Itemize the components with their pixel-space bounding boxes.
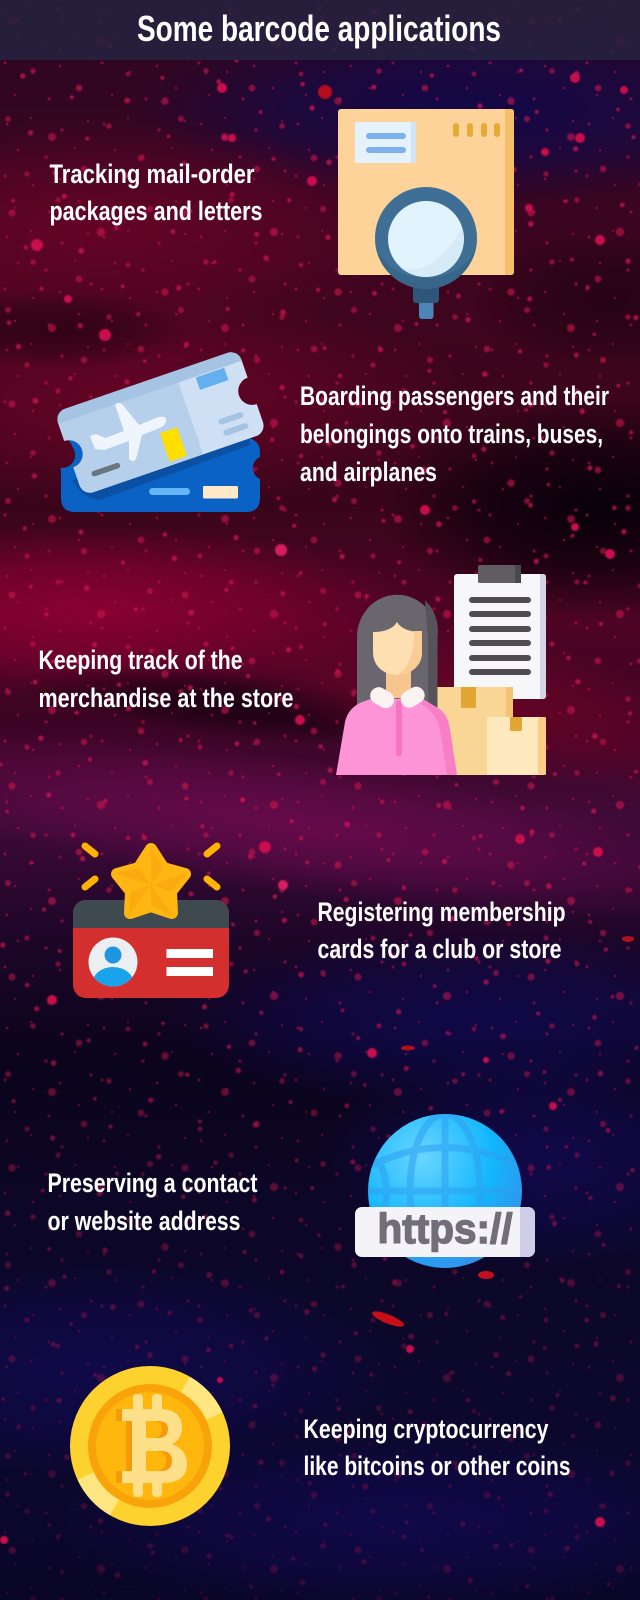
icon: globe with https address bar: https:// [378,1205,513,1252]
header bar [0,0,640,60]
icon: bitcoin coin [70,1366,230,1526]
text: membership cards: cards for a club or store [318,934,562,964]
text: merchandise: Keeping track of the [38,645,242,675]
icon: woman with clipboard and boxes [336,565,546,775]
text: contact or website [48,1168,258,1236]
text: cryptocurrency: Keeping cryptocurrency [304,1414,548,1444]
text: merchandise [38,645,294,713]
text: tracking packages [50,159,262,226]
text: tracking packages: packages and letters [50,196,262,226]
icon: boarding tickets [54,349,267,512]
text: cryptocurrency [304,1414,570,1481]
text: contact or website: Preserving a contact [48,1168,258,1198]
text: tracking packages: Tracking mail-order [50,159,255,189]
icon: globe with https address bar [355,1114,535,1268]
text: membership cards: Registering membership [318,897,566,927]
icon: package with magnifier [338,109,514,319]
text: boarding passengers: and airplanes [300,457,437,487]
title: Some barcode applications [137,8,501,49]
text: boarding passengers [300,381,609,487]
text: merchandise: merchandise at the store [38,683,294,713]
text: contact or website: or website address [48,1206,240,1236]
text: membership cards [318,897,566,964]
icon: membership card with star [73,846,229,1001]
text: cryptocurrency: like bitcoins or other coins [304,1451,570,1481]
